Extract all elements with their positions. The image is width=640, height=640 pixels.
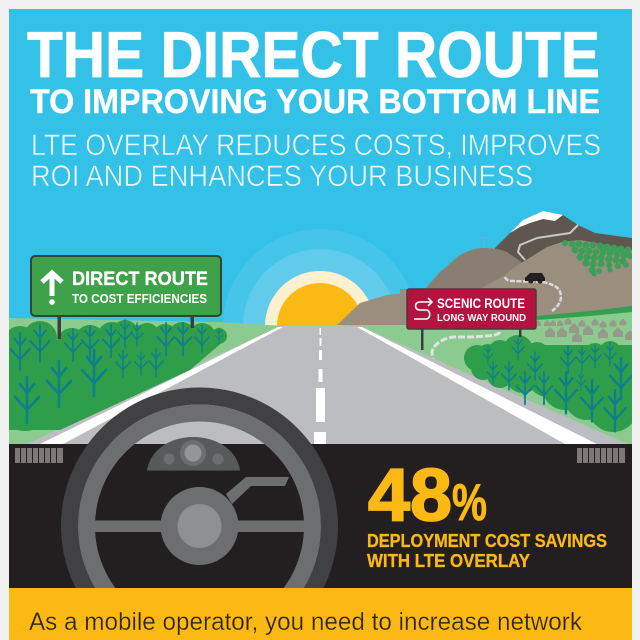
icon: up arrow: [42, 273, 62, 305]
yellow band: [9, 588, 632, 640]
car: [525, 273, 545, 284]
road: [22, 326, 632, 446]
stat: 48%: %: [452, 474, 487, 532]
sign subheading: TO COST EFFICIENCIES: [72, 292, 207, 306]
icon: winding arrow: [414, 298, 432, 319]
dashboard: [9, 444, 632, 588]
mountains: [337, 211, 632, 330]
left vent: [15, 448, 63, 463]
stat caption line 1: DEPLOYMENT COST SAVINGS: [367, 530, 607, 551]
sign heading: SCENIC ROUTE: [437, 296, 525, 311]
forest on mountain: [562, 240, 633, 276]
stat: 48%: [368, 468, 486, 522]
scenic road: [432, 332, 500, 363]
left forest: [0, 320, 227, 431]
village: [535, 318, 635, 342]
intro line 2: ROI AND ENHANCES YOUR BUSINESS: [31, 160, 533, 193]
sign: scenic route: [407, 289, 536, 350]
stat: 48%: 48: [368, 454, 452, 536]
body text: As a mobile operator, you need to increase network: [29, 608, 582, 636]
antenna: [480, 238, 488, 249]
right forest: [464, 335, 640, 432]
sun: [223, 229, 409, 326]
sign: direct route: [31, 256, 221, 339]
hedge line: [537, 306, 632, 320]
sign subheading: LONG WAY ROUND: [437, 312, 526, 324]
steering wheel: [61, 388, 338, 588]
instrument cluster: [147, 437, 240, 470]
ground: [9, 310, 632, 450]
right vent: [577, 448, 625, 463]
sign heading: DIRECT ROUTE: [72, 269, 208, 290]
sky background: [9, 9, 632, 329]
subtitle: TO IMPROVING YOUR BOTTOM LINE: [30, 83, 600, 121]
stat caption line 2: WITH LTE OVERLAY: [367, 550, 531, 571]
